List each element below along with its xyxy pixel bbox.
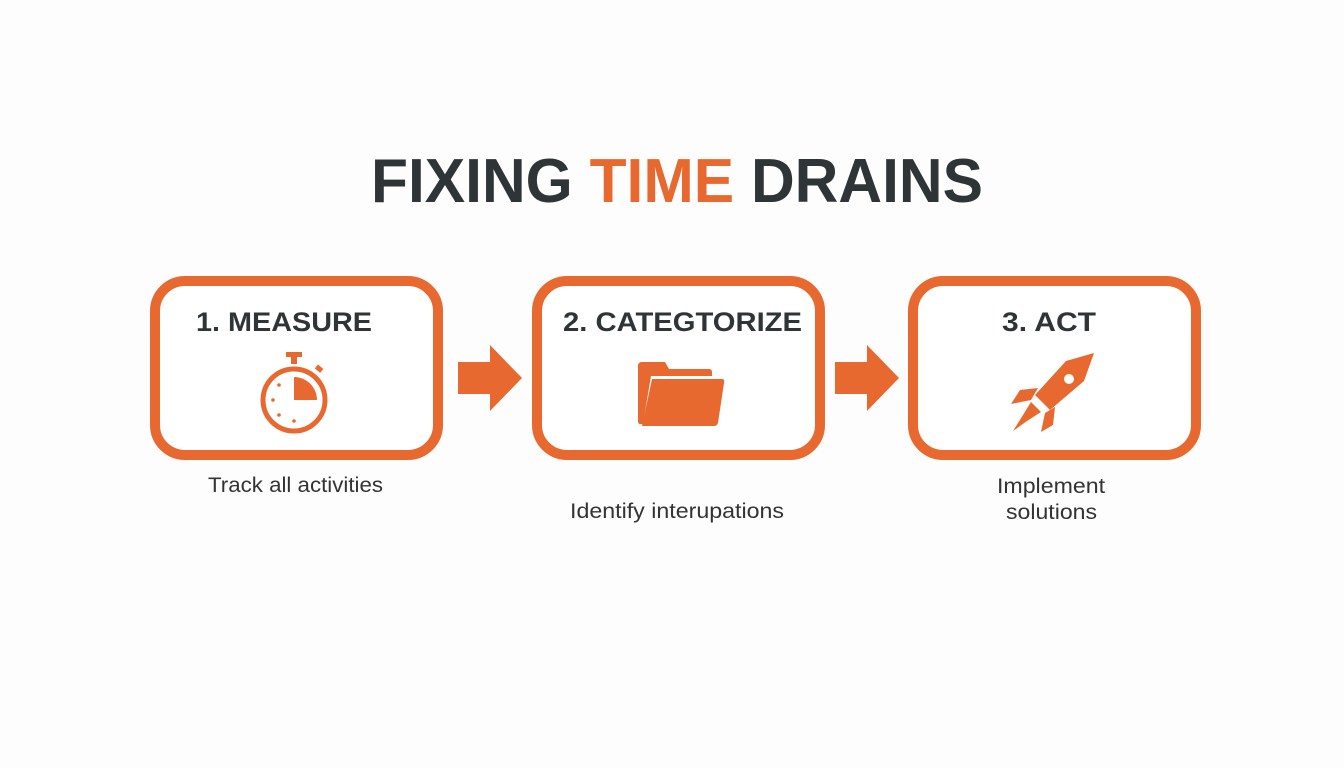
- icon: rocket: [1011, 353, 1094, 432]
- panel: categorize: [537, 281, 820, 455]
- caption: track: Track all activities: [208, 474, 383, 497]
- arrow 1: [458, 345, 522, 411]
- heading: 3. act: 3. ACT: [1002, 307, 1097, 337]
- arrow 2: [835, 345, 899, 411]
- icon: folder: [638, 362, 724, 426]
- title: FIXING TIME DRAINS: [371, 147, 983, 216]
- caption: implement: Implement: [997, 475, 1105, 498]
- caption: identify: Identify interupations: [570, 500, 784, 523]
- panel: act: [913, 281, 1196, 455]
- panel: measure: [155, 281, 438, 455]
- icon: stopwatch: [263, 352, 325, 431]
- heading: 1. measure: 1. MEASURE: [196, 307, 372, 337]
- caption: implement: solutions: [1006, 501, 1097, 524]
- heading: 2. categorize: 2. CATEGTORIZE: [563, 307, 802, 337]
- caption: implement: [997, 475, 1105, 524]
